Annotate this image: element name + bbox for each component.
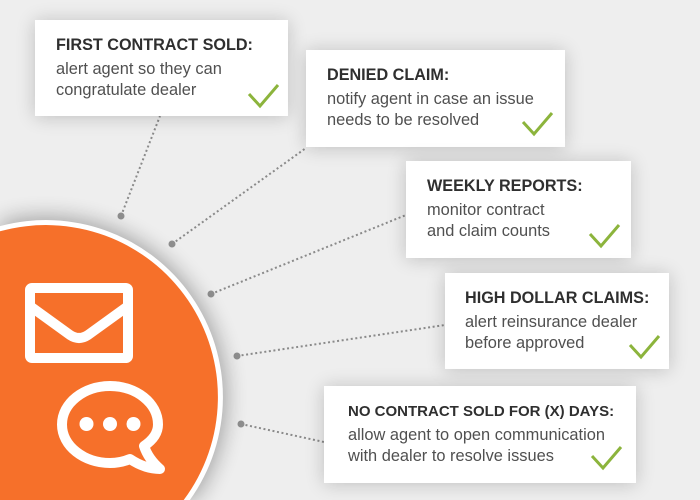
card: first contract sold: FIRST CONTRACT SOLD: [56,36,253,54]
card: weekly reports: and claim counts [427,222,550,240]
card: weekly reports: monitor contract [427,201,545,219]
card: denied claim: DENIED CLAIM: [327,66,449,84]
card: denied claim: notify agent in case an issue [327,90,534,108]
card: high dollar claims: HIGH DOLLAR CLAIMS: [465,289,649,307]
card: no contract sold: allow agent to open communication [348,426,605,444]
icon: envelope [30,288,128,358]
card: denied claim [306,50,565,147]
card: weekly reports: WEEKLY REPORTS: [427,177,583,195]
card: high dollar claims: before approved [465,334,584,352]
card: first contract sold: alert agent so they can [56,60,222,78]
card: first contract sold: congratulate dealer [56,81,196,99]
card: no contract sold: with dealer to resolve issues [348,447,554,465]
card: first contract sold [35,20,288,116]
card: high dollar claims: alert reinsurance dealer [465,313,637,331]
card: high dollar claims [445,273,669,369]
card: no contract sold [324,386,636,483]
card: weekly reports [406,161,631,258]
card: no contract sold: NO CONTRACT SOLD FOR (X) DAYS: [348,403,614,420]
icon: speech bubble [62,386,160,469]
card: denied claim: needs to be resolved [327,111,479,129]
